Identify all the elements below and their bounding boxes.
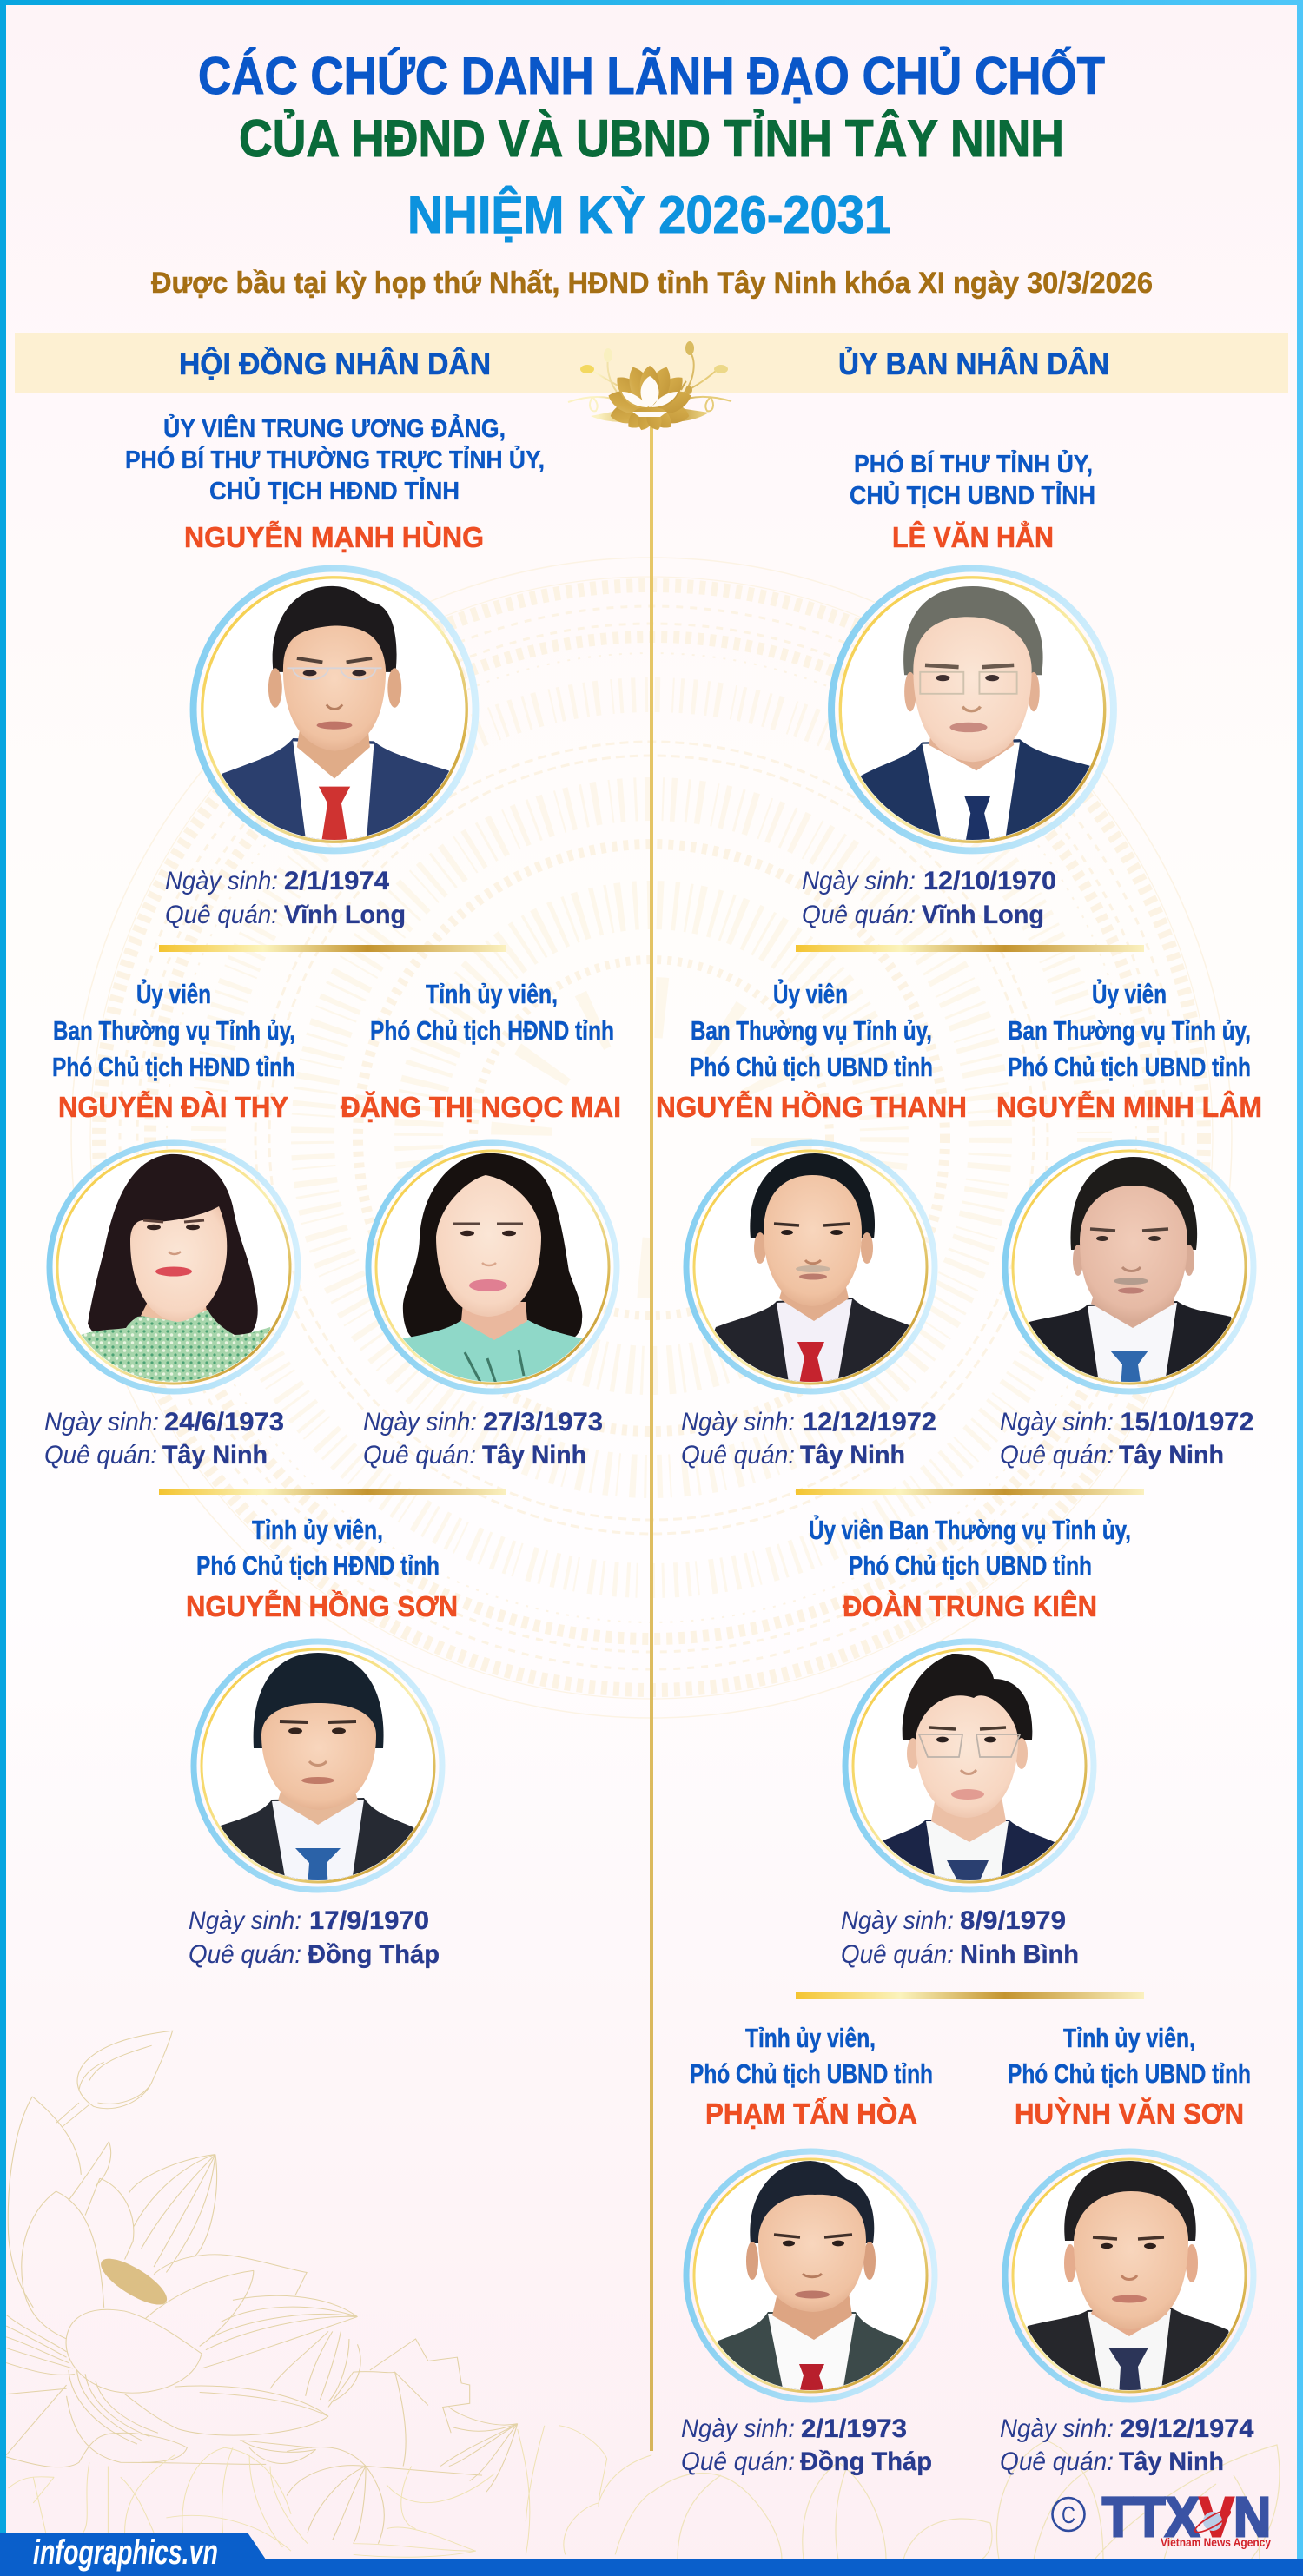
birth date and hometown <box>189 1906 440 1969</box>
birth date and hometown: 27/3/1973 <box>483 1408 603 1437</box>
portrait <box>686 1143 935 1391</box>
logo: TTXVN copyright <box>1053 2486 1271 2549</box>
birth date and hometown: Ngày sinh: <box>44 1408 159 1437</box>
birth date and hometown: Vĩnh Long <box>284 901 406 929</box>
birth date and hometown: Quê quán: <box>1000 2447 1114 2476</box>
title: CÁC CHỨC DANH LÃNH ĐẠO CHỦ CHỐT <box>198 47 1105 105</box>
position: Ủy viên <box>773 978 848 1009</box>
icon: globe <box>1193 2507 1233 2536</box>
position: ỦY VIÊN TRUNG ƯƠNG ĐẢNG, <box>163 413 506 443</box>
position <box>196 1515 440 1581</box>
position <box>690 2023 933 2089</box>
footer bar: infographics.vn <box>33 2533 218 2572</box>
position: Tỉnh ủy viên, <box>745 2023 876 2053</box>
birth date and hometown: Ngày sinh: <box>681 2414 795 2443</box>
birth date and hometown: 29/12/1974 <box>1121 2414 1254 2443</box>
position <box>809 1514 1131 1581</box>
position: Tỉnh ủy viên, <box>252 1515 383 1545</box>
position: Tỉnh ủy viên, <box>1063 2023 1195 2053</box>
birth date and hometown: Đồng Tháp <box>308 1940 440 1969</box>
lotus line art bottom left <box>6 2031 652 2557</box>
birth date and hometown: Quê quán: <box>189 1940 301 1969</box>
birth date and hometown: Ninh Bình <box>960 1940 1079 1969</box>
portrait <box>1005 1143 1253 1391</box>
birth date and hometown: 17/9/1970 <box>309 1906 429 1935</box>
birth date and hometown: 12/12/1972 <box>803 1408 936 1437</box>
portrait <box>50 1143 298 1391</box>
lotus line art bottom right <box>652 2441 1280 2559</box>
birth date and hometown: 12/10/1970 <box>923 867 1056 895</box>
position <box>1008 2023 1251 2089</box>
birth date and hometown: Tây Ninh <box>162 1441 268 1470</box>
portrait <box>194 569 475 850</box>
position: Phó Chủ tịch HĐND tỉnh <box>196 1550 440 1581</box>
position: Phó Chủ tịch UBND tỉnh <box>849 1550 1092 1581</box>
position: Phó Chủ tịch HĐND tỉnh <box>52 1052 295 1082</box>
birth date and hometown: 15/10/1972 <box>1121 1408 1254 1437</box>
panel: Nguyễn Minh Lâm <box>996 978 1262 1470</box>
position <box>125 413 545 505</box>
name: NGUYỄN HỒNG THANH <box>656 1091 967 1123</box>
icon: gold lotus <box>568 341 731 433</box>
name: HUỲNH VĂN SƠN <box>1015 2097 1244 2130</box>
wordmark: TTXVN <box>1102 2486 1271 2548</box>
birth date and hometown <box>44 1408 284 1470</box>
position: Ủy viên <box>1092 978 1167 1009</box>
panel: Nguyễn Hồng Thanh <box>656 978 967 1470</box>
birth date and hometown: Ngày sinh: <box>189 1906 301 1935</box>
tagline: Vietnam News Agency <box>1161 2535 1271 2549</box>
birth date and hometown <box>681 2414 932 2476</box>
birth date and hometown: Đồng Tháp <box>800 2447 932 2476</box>
birth date and hometown: Vĩnh Long <box>922 901 1044 929</box>
birth date and hometown <box>841 1906 1079 1969</box>
birth date and hometown: Ngày sinh: <box>841 1906 954 1935</box>
birth date and hometown: Quê quán: <box>841 1940 954 1969</box>
divider row 3 <box>796 1992 1144 1999</box>
column header band <box>15 333 1288 393</box>
panel: Đoàn Trung Kiên <box>809 1514 1131 1969</box>
birth date and hometown: Quê quán: <box>165 901 278 929</box>
portrait <box>1005 2151 1253 2400</box>
birth date and hometown: 2/1/1974 <box>284 867 389 895</box>
panel: Lê Văn Hẳn <box>802 449 1114 929</box>
central divider line <box>650 426 653 2451</box>
birth date and hometown: Ngày sinh: <box>681 1408 795 1437</box>
panel: Nguyễn Đài Thy <box>44 978 298 1470</box>
birth date and hometown: 2/1/1973 <box>801 2414 907 2443</box>
position: Tỉnh ủy viên, <box>426 979 558 1009</box>
portrait <box>845 1641 1094 1890</box>
position <box>1008 978 1251 1082</box>
birth date and hometown: Ngày sinh: <box>363 1408 477 1437</box>
birth date and hometown: Tây Ninh <box>1119 2447 1224 2476</box>
panel: Nguyễn Mạnh Hùng <box>125 413 545 929</box>
footer bar <box>0 2533 1303 2576</box>
name: ĐẶNG THỊ NGỌC MAI <box>341 1091 621 1123</box>
subtitle: Được bầu tại kỳ họp thứ Nhất, HĐND tỉnh Tây Ninh khóa XI ngày 30/3/2026 <box>151 267 1153 300</box>
birth date and hometown: Tây Ninh <box>800 1441 905 1470</box>
portrait <box>194 1641 442 1890</box>
birth date and hometown: 8/9/1979 <box>960 1906 1066 1935</box>
position <box>52 978 295 1082</box>
birth date and hometown <box>681 1408 936 1470</box>
birth date and hometown: Ngày sinh: <box>1000 1408 1114 1437</box>
position: PHÓ BÍ THƯ TỈNH ỦY, <box>854 449 1093 479</box>
birth date and hometown: Quê quán: <box>44 1441 157 1470</box>
icon: copyright <box>1053 2498 1084 2531</box>
name: NGUYỄN MINH LÂM <box>996 1091 1262 1123</box>
term heading: NHIỆM KỲ 2026-2031 <box>407 186 891 244</box>
birth date and hometown: Quê quán: <box>802 901 916 929</box>
birth date and hometown <box>363 1408 603 1470</box>
birth date and hometown <box>1000 1408 1254 1470</box>
panel: Đặng Thị Ngọc Mai <box>341 979 621 1470</box>
bronze drum watermark <box>71 558 1232 1718</box>
divider row 2 <box>159 1489 1144 1495</box>
position: Ban Thường vụ Tỉnh ủy, <box>53 1015 295 1046</box>
birth date and hometown: Tây Ninh <box>482 1441 586 1470</box>
column header band: ỦY BAN NHÂN DÂN <box>838 347 1109 381</box>
position: CHỦ TỊCH HĐND TỈNH <box>209 476 460 505</box>
birth date and hometown: Quê quán: <box>363 1441 476 1470</box>
birth date and hometown: 24/6/1973 <box>164 1408 284 1437</box>
position <box>850 449 1095 510</box>
name: NGUYỄN HỒNG SƠN <box>186 1590 458 1622</box>
birth date and hometown <box>802 867 1056 929</box>
birth date and hometown: Ngày sinh: <box>1000 2414 1114 2443</box>
birth date and hometown <box>1000 2414 1254 2476</box>
portrait <box>831 569 1114 850</box>
position: CHỦ TỊCH UBND TỈNH <box>850 480 1095 510</box>
icon: copyright: C <box>1062 2501 1075 2528</box>
birth date and hometown: Quê quán: <box>681 1441 795 1470</box>
name: NGUYỄN MẠNH HÙNG <box>184 521 484 553</box>
position: Ban Thường vụ Tỉnh ủy, <box>691 1015 932 1046</box>
position: Phó Chủ tịch UBND tỉnh <box>690 1052 933 1082</box>
name: PHẠM TẤN HÒA <box>705 2097 917 2130</box>
panel: Phạm Tấn Hòa <box>681 2023 935 2476</box>
title <box>198 47 1105 168</box>
position: Phó Chủ tịch HĐND tỉnh <box>370 1015 614 1046</box>
birth date and hometown <box>165 867 406 929</box>
birth date and hometown: Ngày sinh: <box>165 867 278 895</box>
position: PHÓ BÍ THƯ THƯỜNG TRỰC TỈNH ỦY, <box>125 445 545 474</box>
birth date and hometown: Quê quán: <box>1000 1441 1114 1470</box>
birth date and hometown: Tây Ninh <box>1119 1441 1224 1470</box>
name: NGUYỄN ĐÀI THY <box>58 1091 288 1123</box>
portrait <box>686 2151 935 2400</box>
position: Ủy viên Ban Thường vụ Tỉnh ủy, <box>809 1514 1131 1545</box>
birth date and hometown: Quê quán: <box>681 2447 795 2476</box>
panel: Nguyễn Hồng Sơn <box>186 1515 458 1969</box>
title: CỦA HĐND VÀ UBND TỈNH TÂY NINH <box>239 109 1064 168</box>
position <box>370 979 614 1046</box>
divider row 1 <box>159 945 1144 952</box>
position: Ủy viên <box>136 978 211 1009</box>
panel: Huỳnh Văn Sơn <box>1000 2023 1254 2476</box>
name: LÊ VĂN HẲN <box>892 521 1054 553</box>
position: Phó Chủ tịch UBND tỉnh <box>690 2058 933 2089</box>
birth date and hometown: Ngày sinh: <box>802 867 916 895</box>
position <box>690 978 933 1082</box>
portrait <box>368 1143 617 1391</box>
column header band: HỘI ĐỒNG NHÂN DÂN <box>179 347 491 381</box>
name: ĐOÀN TRUNG KIÊN <box>843 1590 1097 1622</box>
